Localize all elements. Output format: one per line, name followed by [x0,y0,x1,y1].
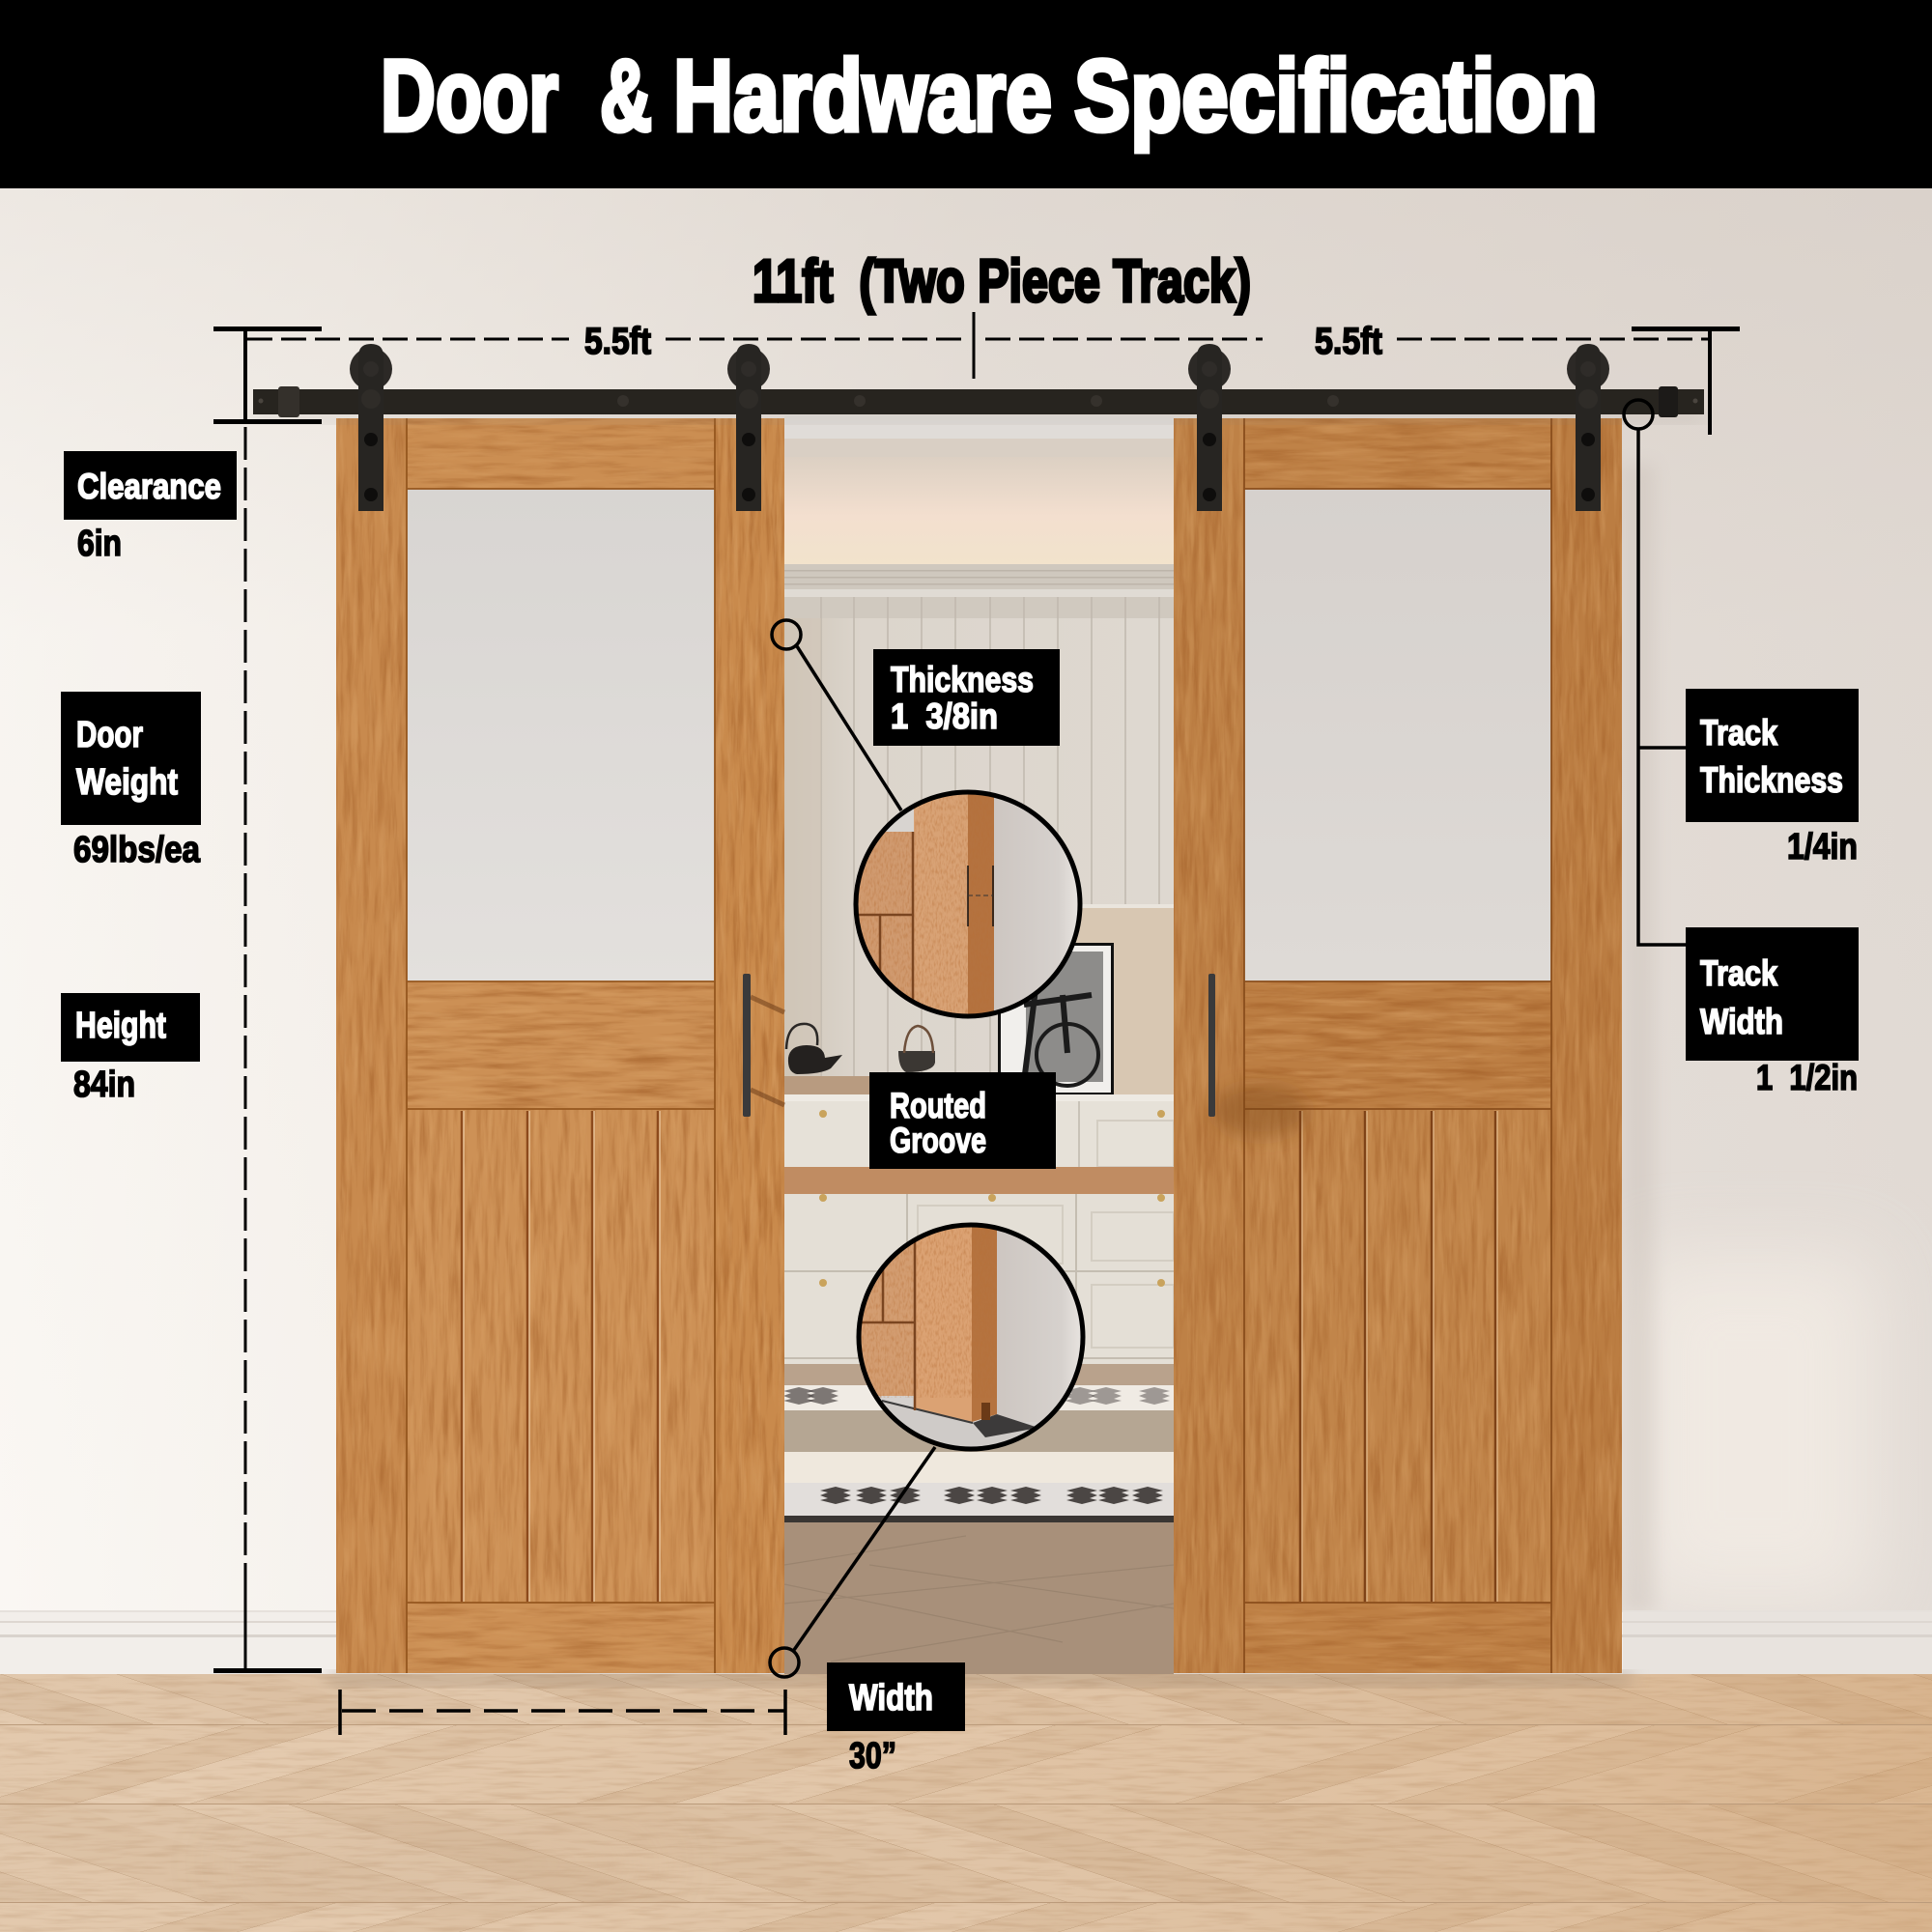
central opening: kitchen scene [783,415,1174,1674]
glass panel [1244,489,1551,981]
heading: track length: 11ft (Two Piece Track) [753,248,1251,315]
label: thickness: Thickness [891,660,1034,699]
label: track width: Track [1700,953,1777,993]
barn door track [253,344,1704,511]
dimension: track length [213,248,1740,435]
label: width: Width [849,1678,933,1719]
door handle [743,974,784,1117]
title: Door [381,40,558,153]
label: door weight: Weight [76,762,178,803]
label: left half: 5.5ft [584,321,651,362]
dimension: height line [213,427,322,1673]
callout: routed groove magnifier [770,1219,1092,1677]
glass panel [407,489,715,981]
door handle [1208,974,1215,1117]
label: clearance [64,451,237,564]
hanger 4 [1567,344,1609,511]
label: clearance: Clearance [77,467,221,506]
label: track width: Width [1700,1002,1783,1041]
label: thickness [873,649,1060,746]
framed photo [998,943,1114,1095]
title: & [600,40,652,153]
title [381,40,1598,153]
label: door weight [61,692,201,870]
rug [783,1385,1174,1522]
wood shelf [784,1167,1174,1194]
label: width [827,1662,965,1776]
label: thickness: 1 3/8in [891,696,998,736]
label: routed groove [869,1072,1056,1169]
label: track thickness: Thickness [1700,760,1843,800]
header bar [0,0,1932,188]
wall background [0,188,1932,1676]
room floor [784,1364,1174,1385]
pointer: routed groove [770,1447,935,1677]
label: routed groove: Groove [890,1121,986,1160]
hanger 1 [350,344,392,511]
label: door weight: Door [76,715,143,755]
value: track width: 1 1/2in [1756,1058,1858,1097]
lower cabinets [784,1194,1174,1364]
value: height: 84in [73,1065,135,1105]
floor: chevron parquet [0,1674,1932,1932]
pointer: track callouts [1624,400,1686,945]
label: height [61,993,200,1105]
hanger 3 [1188,344,1231,511]
callout: thickness magnifier [772,620,1092,1025]
title: Hardware [673,40,1052,153]
track end stops [278,386,299,417]
label: routed groove: Routed [890,1086,986,1125]
backsplash [1053,907,1174,1096]
pointer: thickness [772,620,901,810]
label: right half: 5.5ft [1315,321,1382,362]
hanger 2 [727,344,770,511]
door handle shadow [1212,1084,1309,1138]
baseboard [0,1610,1932,1674]
value: clearance: 6in [77,524,122,564]
title: Specification [1074,40,1598,153]
label: height: Height [75,1006,166,1046]
counter [784,1076,891,1097]
value: track thickness: 1/4in [1787,827,1858,867]
label: track width [1686,927,1859,1097]
wall panels [784,597,1174,1096]
label: track thickness: Track [1700,713,1777,753]
value: door weight: 69lbs/ea [73,830,201,870]
right door [1174,418,1622,1673]
value: width: 30” [849,1736,896,1776]
kettles [786,1024,935,1074]
upper cabinets [784,1101,1174,1167]
label: track thickness [1686,689,1859,867]
dimension: door width [340,1690,785,1735]
left door [336,418,784,1673]
